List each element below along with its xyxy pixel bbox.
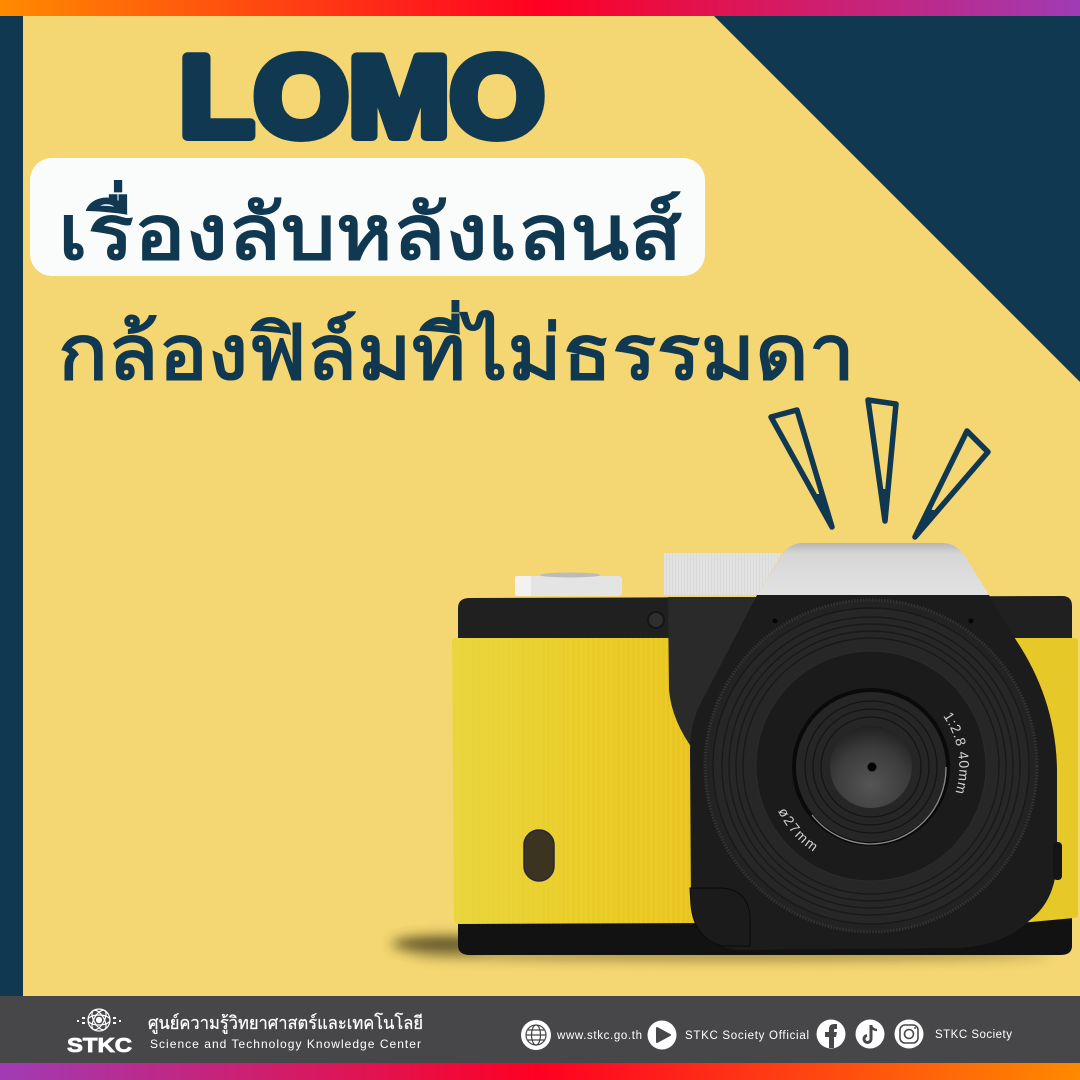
ribbed silver dial — [664, 553, 782, 595]
lens glass ring — [794, 690, 948, 844]
lens highlight — [812, 767, 946, 844]
icon: play — [648, 1020, 676, 1050]
top-right navy triangle — [714, 16, 1080, 382]
logo atom mark — [77, 1008, 121, 1032]
organisation name English: Science and Technology Knowledge Center — [150, 1037, 421, 1051]
viewfinder window — [524, 830, 554, 881]
website text: www.stkc.go.th — [556, 1030, 642, 1042]
lens marking: ø27mm: ø27mm — [778, 809, 816, 852]
dark pillar — [668, 597, 762, 790]
lens marking: 1:2.8 40mm: 1:2.8 40mm — [944, 712, 969, 794]
icon: instagram — [894, 1020, 924, 1048]
subtitle pill — [30, 158, 705, 276]
second heading line: กล้องฟิล์มที่ไม่ธรรมดา — [58, 301, 855, 396]
icon: facebook — [816, 1020, 846, 1048]
bottom gradient band — [0, 1063, 1080, 1080]
aperture hole — [868, 762, 876, 772]
front black body plate — [690, 595, 1057, 950]
lens knurled outer ring — [705, 600, 1037, 932]
organisation name Thai: ศูนย์ความรู้วิทยาศาสตร์และเทคโนโลยี — [148, 1012, 423, 1034]
small screw — [648, 612, 664, 628]
title: LOMO: LOMO — [180, 34, 544, 161]
lens — [705, 600, 1037, 932]
flash door panel — [690, 888, 750, 946]
instagram text: STKC Society — [935, 1029, 1012, 1041]
silver hump — [757, 543, 989, 595]
ground shadow — [410, 947, 1050, 961]
left navy bar — [0, 16, 23, 996]
camera body bottom black — [458, 918, 1072, 955]
lens grooved rings — [713, 608, 1029, 924]
right yellow grip — [1010, 638, 1078, 923]
icon: globe — [521, 1020, 551, 1050]
footer logo: STKC — [67, 1008, 132, 1057]
side wheel — [1053, 842, 1062, 880]
footer bar — [0, 996, 1080, 1063]
lens name plate — [756, 651, 986, 881]
logo wordmark: STKC — [67, 1035, 132, 1057]
screws — [772, 618, 974, 624]
camera — [386, 543, 1078, 968]
left shadow — [392, 936, 492, 952]
silver shutter button — [515, 572, 622, 596]
camera body top black — [458, 596, 1072, 640]
left yellow grip — [452, 638, 705, 924]
icon: tiktok — [856, 1020, 884, 1048]
subtitle text: เรื่องลับหลังเลนส์ — [58, 181, 682, 276]
lens inner rings — [805, 701, 937, 833]
aperture — [830, 726, 912, 808]
youtube text: STKC Society Official — [685, 1030, 809, 1042]
icon: emphasis rays above camera — [771, 400, 988, 537]
top gradient band — [0, 0, 1080, 16]
